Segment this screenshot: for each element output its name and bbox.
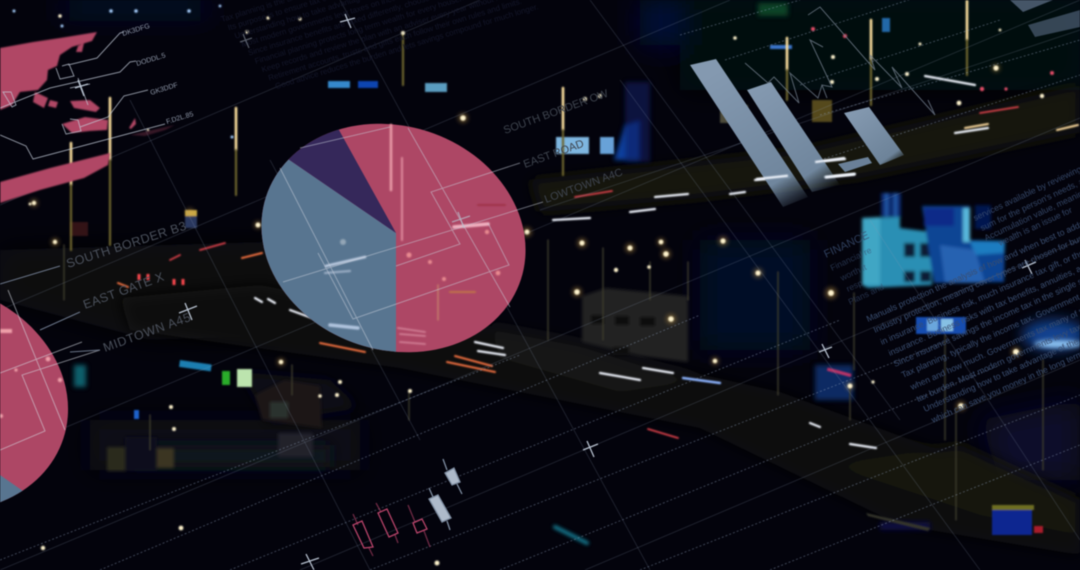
candlestick chart	[353, 459, 462, 556]
panel paragraph top	[829, 134, 1080, 307]
road labels left: MIDTOWN A45	[101, 310, 193, 355]
road labels left: SOUTH BORDER B3	[65, 219, 188, 271]
red candles	[353, 503, 430, 556]
main pie chart	[260, 122, 544, 353]
bar chart top right	[690, 0, 1080, 207]
panel paragraph top: resp	[845, 278, 864, 294]
car light trails	[118, 76, 1078, 543]
road labels left	[0, 219, 193, 355]
bar one	[690, 59, 808, 207]
bar fragment	[838, 157, 872, 172]
buildings	[107, 288, 688, 471]
map value labels	[122, 23, 194, 126]
panel paragraph top: Financial re	[829, 245, 873, 273]
map value labels: DK3DFG	[122, 23, 151, 38]
second pie chart, left edge	[0, 290, 100, 503]
road labels centre: EAST ROAD	[522, 138, 586, 171]
panel paragraph main	[865, 178, 1080, 425]
panel paragraph top: worth it	[838, 262, 869, 283]
top-right bar fragments	[1010, 0, 1053, 12]
map target brackets and leader lines	[0, 32, 165, 159]
pie segment purple	[288, 129, 396, 233]
bar three	[844, 107, 904, 165]
financial text panel right	[822, 134, 1080, 425]
billboard and blue glow	[70, 3, 1080, 419]
white candles	[429, 459, 462, 530]
bar two	[747, 82, 840, 192]
map value labels: GK3DDF	[150, 82, 179, 97]
map value labels: F.D2L.85	[166, 111, 194, 126]
wireframe overlay on pie	[280, 127, 543, 350]
road labels centre: SOUTH BORDER OW	[502, 87, 611, 137]
panel paragraph top: wealth is an issue for	[996, 205, 1074, 248]
world map overlay	[0, 23, 194, 203]
road labels centre: LOWTOWN A4C	[543, 166, 624, 206]
lights visible through pie	[325, 125, 505, 344]
panel heading: FINANCE	[822, 229, 871, 261]
map land masses	[0, 32, 175, 203]
top-left dim text block: Good advice reduces the burden and lets savings compound for much longer.	[274, 2, 539, 91]
zigzag line chart	[745, 7, 935, 115]
road labels centre	[502, 87, 624, 206]
map value labels: DODDL.5	[136, 52, 167, 68]
road labels left: EAST GATE X	[81, 269, 166, 312]
pie segment pink	[261, 123, 526, 353]
highway sign	[866, 505, 1043, 535]
glowing blue building and screen	[862, 193, 1005, 288]
panel paragraph top: Plans and	[847, 282, 886, 307]
wireframe overlay on left pie	[0, 290, 100, 450]
pie segment grey-blue	[261, 159, 396, 352]
